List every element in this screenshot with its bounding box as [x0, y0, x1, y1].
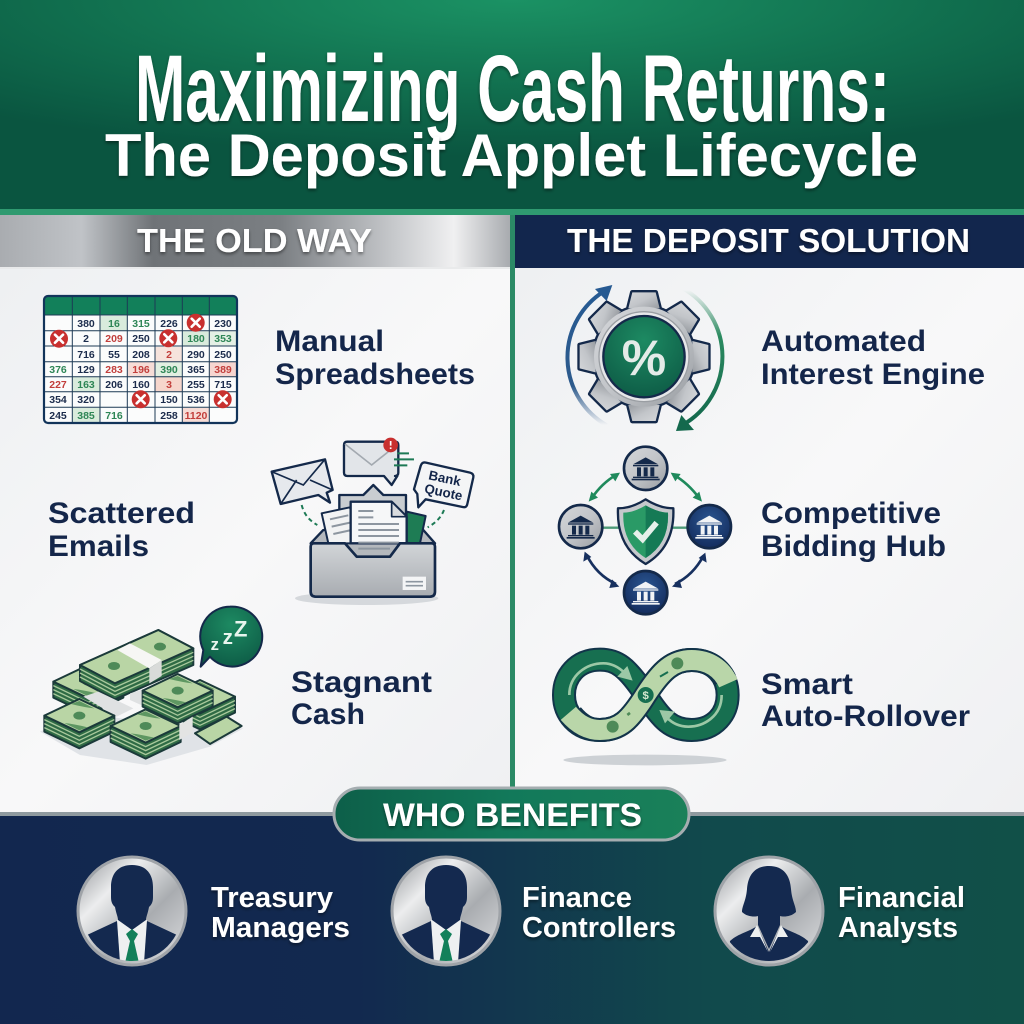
bubble text: zzz: Z	[234, 617, 247, 642]
label: financial analysts	[838, 882, 965, 944]
icon: spreadsheet: 209	[105, 333, 123, 345]
icon: spreadsheet: 227	[49, 379, 67, 391]
icon: spreadsheet: 245	[49, 410, 67, 422]
icon: spreadsheet: 163	[77, 379, 95, 391]
icon: spreadsheet: 365	[187, 364, 205, 376]
icon: spreadsheet: 129	[77, 364, 95, 376]
icon: spreadsheet: 353	[214, 333, 232, 345]
label: financial analysts: Financial	[838, 882, 965, 914]
label: smart auto-rollover: Auto-Rollover	[761, 700, 970, 733]
icon: spreadsheet: 258	[160, 410, 178, 422]
label: automated interest engine: Interest Engine	[761, 358, 985, 391]
icon: spreadsheet	[44, 296, 237, 423]
label: stagnant cash	[291, 666, 432, 731]
label: competitive bidding hub	[761, 497, 946, 563]
bubble text: zzz	[211, 617, 247, 654]
heading: the old way: THE OLD WAY	[137, 222, 372, 259]
icon: email inbox tray: Quote	[423, 481, 464, 504]
avatar: financial analyst	[715, 857, 823, 965]
label: competitive bidding hub: Competitive	[761, 497, 941, 530]
icon: spreadsheet: 376	[49, 364, 67, 376]
icon: spreadsheet: 3	[166, 379, 172, 391]
label: scattered emails	[48, 497, 195, 563]
icon: spreadsheet: 55	[108, 349, 120, 361]
panel: the old way	[0, 215, 510, 813]
icon: competitive bidding hub	[559, 447, 731, 614]
heading: the deposit solution: THE DEPOSIT SOLUTION	[567, 222, 970, 259]
title banner	[0, 0, 1024, 215]
icon: spreadsheet: 390	[160, 364, 178, 376]
label: smart auto-rollover: Smart	[761, 668, 853, 701]
icon: email inbox tray	[272, 438, 473, 605]
label: finance controllers: Controllers	[522, 912, 676, 944]
avatar: treasury manager	[78, 857, 186, 965]
icon: spreadsheet: 16	[108, 318, 120, 330]
label: finance controllers	[522, 882, 676, 944]
icon: spreadsheet: 380	[77, 318, 95, 330]
bubble text: bank quote: Bank	[427, 467, 463, 489]
label: treasury managers: Managers	[211, 912, 350, 944]
icon: spreadsheet: 389	[214, 364, 232, 376]
label: financial analysts: Analysts	[838, 912, 958, 944]
icon: spreadsheet: 283	[105, 364, 123, 376]
pill heading: who benefits: WHO BENEFITS	[383, 797, 642, 833]
center divider	[510, 215, 515, 813]
icon: spreadsheet: 354	[49, 394, 67, 406]
icon: spreadsheet: 206	[105, 379, 123, 391]
icon: spreadsheet: 208	[132, 349, 150, 361]
icon: automated interest gear	[567, 285, 722, 431]
icon: spreadsheet: 385	[77, 410, 95, 422]
label: automated interest engine	[761, 325, 985, 391]
label: treasury managers: Treasury	[211, 882, 333, 914]
subtitle line: The Deposit Applet Lifecycle	[105, 122, 918, 189]
dollar sign: $	[642, 690, 649, 702]
icon: infinity auto-rollover	[563, 657, 728, 765]
icon: stacks of idle cash	[40, 607, 262, 765]
icon: spreadsheet: 716	[105, 410, 123, 422]
icon: spreadsheet: 290	[187, 349, 205, 361]
icon: spreadsheet: 2	[83, 333, 89, 345]
icon: spreadsheet: 1120	[185, 410, 208, 422]
label: manual spreadsheets	[275, 325, 475, 391]
label: competitive bidding hub: Bidding Hub	[761, 530, 946, 563]
icon: spreadsheet: 250	[132, 333, 150, 345]
label: finance controllers: Finance	[522, 882, 632, 914]
icon: spreadsheet: 226	[160, 318, 178, 330]
label: scattered emails: Emails	[48, 530, 149, 563]
icon: spreadsheet: 230	[214, 318, 232, 330]
icon: spreadsheet: 180	[187, 333, 205, 345]
icon: spreadsheet: 715	[214, 379, 232, 391]
icon: spreadsheet: 160	[132, 379, 150, 391]
label: smart auto-rollover	[761, 668, 970, 733]
icon: spreadsheet: 2	[166, 349, 172, 361]
percent sign: %	[622, 330, 666, 386]
icon: spreadsheet: 320	[77, 394, 95, 406]
label: stagnant cash: Stagnant	[291, 666, 432, 699]
panel: who benefits	[0, 812, 1024, 1024]
label: treasury managers	[211, 882, 350, 944]
icon: spreadsheet: 250	[214, 349, 232, 361]
label: stagnant cash: Cash	[291, 698, 365, 731]
label: scattered emails: Scattered	[48, 497, 195, 530]
label: manual spreadsheets: Spreadsheets	[275, 358, 475, 391]
bubble text: zzz: z	[223, 626, 233, 649]
bubble text: zzz: z	[211, 635, 219, 654]
pill heading: who benefits	[334, 788, 689, 840]
label: manual spreadsheets: Manual	[275, 325, 384, 358]
icon: spreadsheet: 196	[132, 364, 150, 376]
icon: spreadsheet: 716	[77, 349, 95, 361]
label: automated interest engine: Automated	[761, 325, 926, 358]
panel: the deposit solution	[515, 215, 1024, 813]
icon: spreadsheet: 315	[132, 318, 150, 330]
icon: spreadsheet: 255	[187, 379, 205, 391]
icon: spreadsheet: 536	[187, 394, 205, 406]
icon: spreadsheet: 150	[160, 394, 178, 406]
avatar: finance controller	[392, 857, 500, 965]
